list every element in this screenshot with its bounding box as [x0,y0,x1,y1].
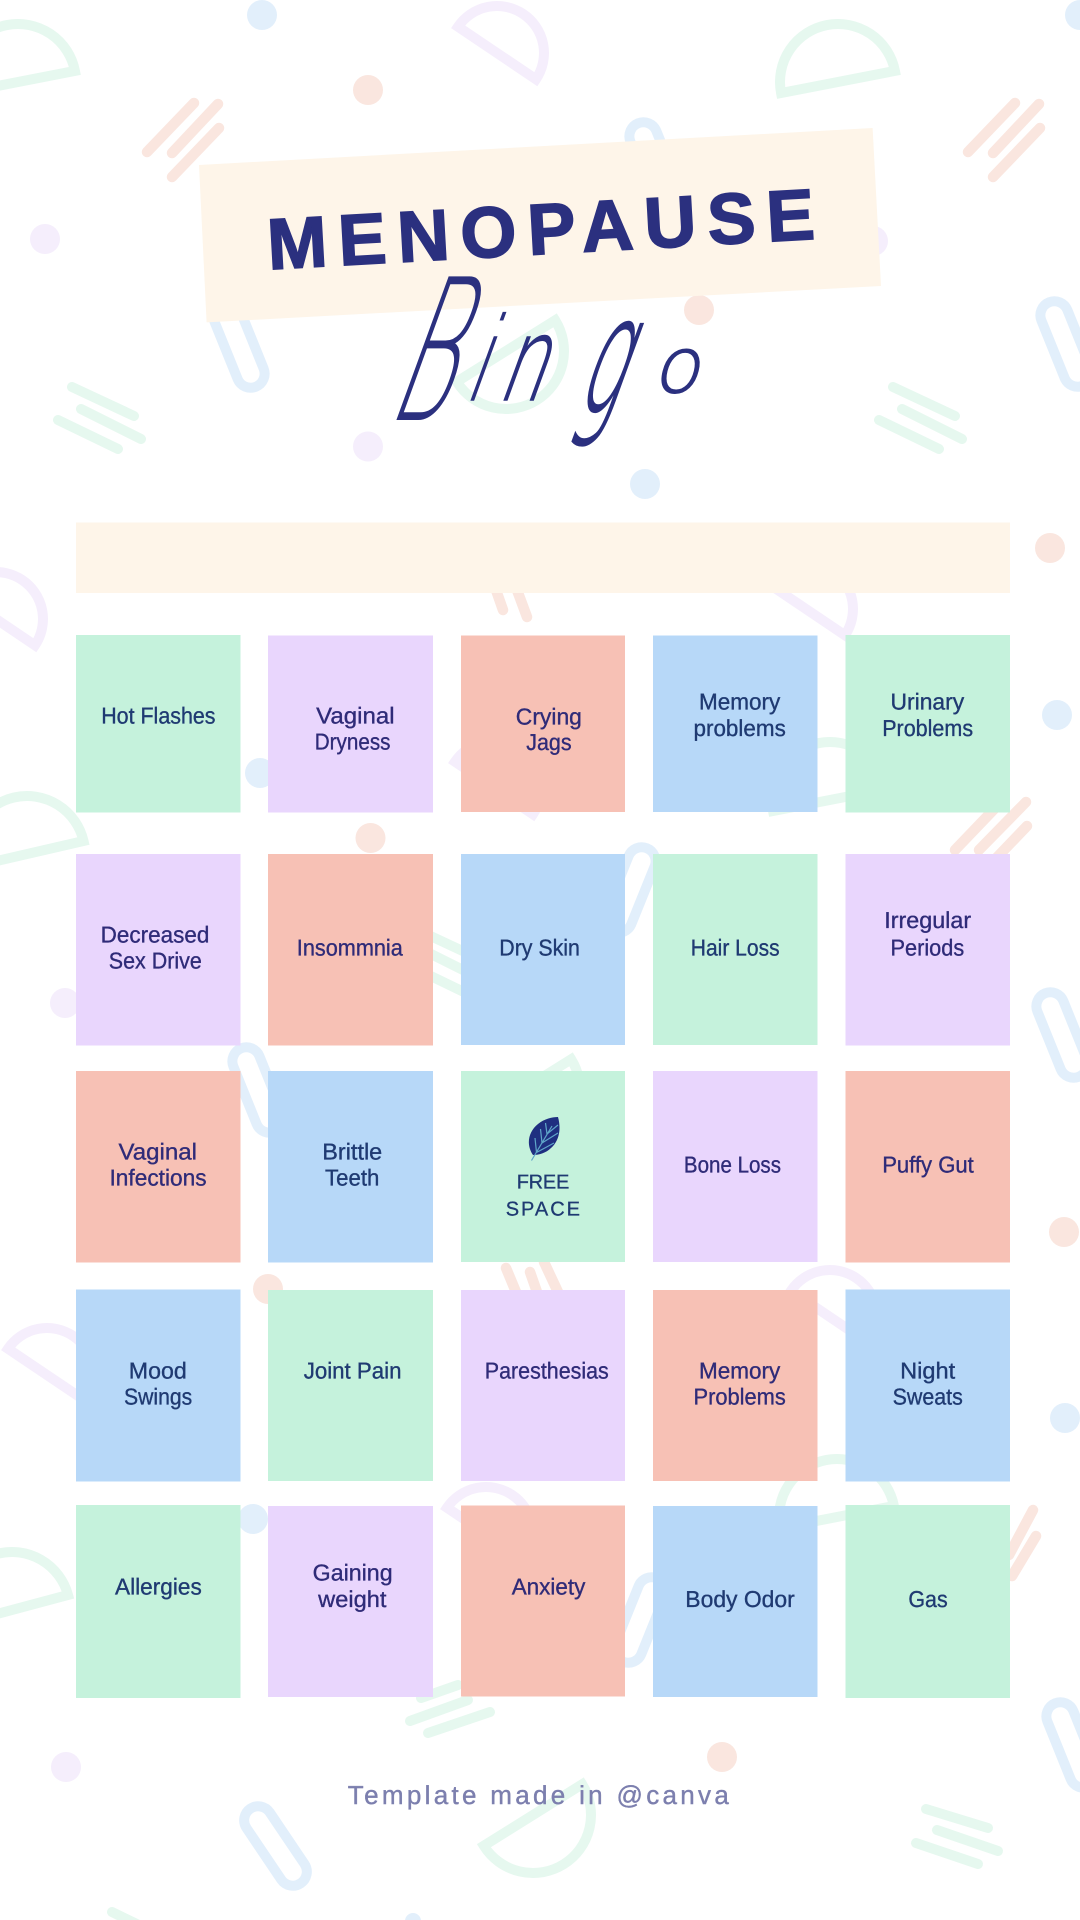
square: Crying Jags [461,636,625,812]
square: Gas [846,1505,1010,1698]
square: Paresthesias: Paresthesias [485,1357,609,1383]
square: Night Sweats: Night [900,1357,956,1383]
square: Brittle Teeth: Teeth [325,1164,379,1190]
square: Night Sweats: Sweats [893,1383,963,1409]
square: Mood Swings: Mood [129,1357,187,1383]
square: Hair Loss: Hair Loss [691,935,780,961]
square: Free Space: SPACE [506,1199,580,1221]
square: Insommnia [268,854,433,1046]
square: Hot Flashes: Hot Flashes [101,703,216,729]
square: Crying Jags: Crying [516,704,582,730]
square: Allergies: Allergies [115,1574,202,1600]
footer credit: Template made in @canva [348,1780,729,1810]
square: Urinary Problems [846,635,1010,812]
square: Mood Swings [76,1290,240,1482]
square: Memory Problems: Memory [699,1357,781,1383]
square: Memory problems [653,636,818,812]
square: Anxiety: Anxiety [512,1574,586,1600]
square: Memory Problems [653,1290,818,1481]
blank name bar [76,522,1010,593]
square: Gaining weight: Gaining [313,1560,393,1586]
square: Insommnia: Insommnia [297,935,403,961]
square: Night Sweats [846,1290,1010,1482]
icon: leaf [529,1117,560,1160]
title: MENOPAUSE: MENOPAUSE [265,175,817,285]
title: Bingo script [368,238,716,467]
square: Vaginal Dryness: Dryness [315,729,390,755]
title: Bingo script: o [647,321,716,411]
square: Vaginal Dryness [268,636,433,812]
square: Vaginal Infections: Vaginal [118,1138,197,1164]
square: Free Space [461,1071,625,1262]
square: Brittle Teeth: Brittle [322,1138,382,1164]
bingo grid [76,635,1010,1698]
square: Vaginal Dryness: Vaginal [316,703,395,729]
square: Memory problems: problems [694,715,786,741]
square: Urinary Problems: Urinary [890,689,965,715]
square: Memory Problems: Problems [694,1383,786,1409]
square: Hot Flashes [76,635,240,812]
square: Joint Pain [268,1290,433,1481]
square: Hair Loss [653,854,818,1045]
square: Gas: Gas [908,1586,948,1612]
square: Body Odor: Body Odor [685,1586,795,1612]
square: Irregular Periods [846,854,1010,1046]
square: Memory problems: Memory [699,689,781,715]
square: Irregular Periods: Irregular [884,907,971,933]
square: Gaining weight: weight [317,1586,387,1612]
square: Dry Skin [461,854,625,1045]
square: Urinary Problems: Problems [882,715,973,741]
square: Decreased Sex Drive [76,854,240,1046]
square: Mood Swings: Swings [124,1383,192,1409]
square: Decreased Sex Drive: Decreased [101,922,209,948]
square: Dry Skin: Dry Skin [499,935,580,961]
square: Bone Loss [653,1071,818,1262]
title: Bingo script: B [368,238,512,467]
square: Free Space: FREE [517,1172,569,1194]
title: Bingo script: i [454,294,520,428]
square: Brittle Teeth [268,1071,433,1262]
square: Joint Pain: Joint Pain [304,1357,402,1383]
square: Puffy Gut: Puffy Gut [882,1151,974,1177]
title: Bingo script: g [560,264,671,451]
title: Bingo script: n [486,294,580,428]
square: Crying Jags: Jags [526,729,572,755]
title banner [199,128,881,322]
square: Decreased Sex Drive: Sex Drive [109,948,202,974]
square: Paresthesias [461,1290,625,1481]
square: Vaginal Infections: Infections [110,1164,207,1190]
square: Body Odor [653,1506,818,1697]
square: Puffy Gut [846,1071,1010,1262]
square: Irregular Periods: Periods [890,935,964,961]
square: Vaginal Infections [76,1071,240,1262]
square: Allergies [76,1505,240,1698]
square: Bone Loss: Bone Loss [684,1151,781,1177]
square: Anxiety [461,1506,625,1696]
square: Gaining weight [268,1506,433,1697]
